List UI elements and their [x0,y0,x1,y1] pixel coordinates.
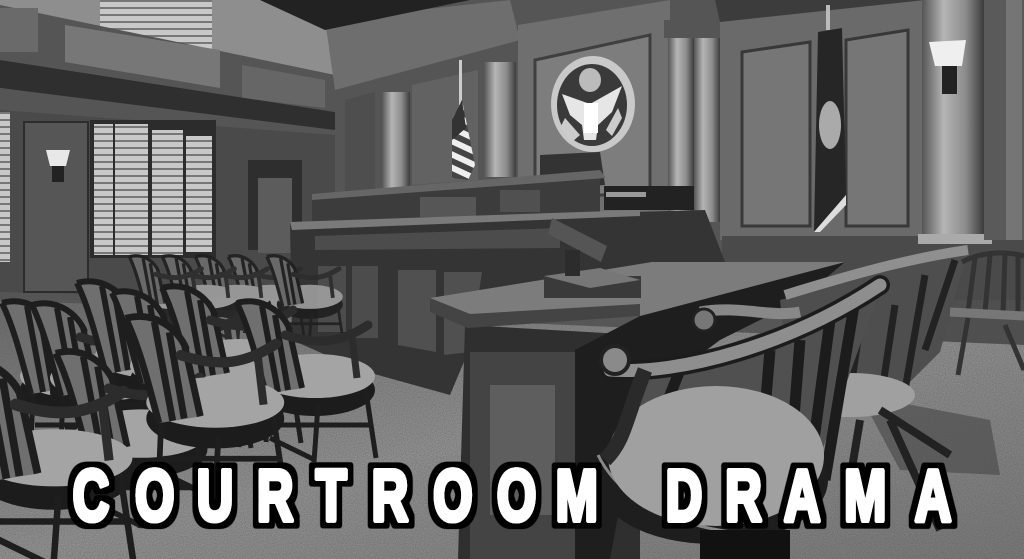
right wall panel [518,0,670,215]
right wall [720,0,925,240]
jury chairs behind [780,250,968,530]
window with blinds [90,120,216,258]
balcony railing [0,5,335,140]
left wood wall [0,110,335,300]
wall sconce right [929,40,966,94]
centre back wall [335,20,520,230]
books on bench [604,186,694,210]
floor [0,300,1024,559]
flag right [814,5,846,232]
column far right [918,0,1024,244]
left edge blinds [0,112,10,262]
cornice [325,0,520,90]
far right chair [950,253,1024,375]
column left [382,92,410,197]
upper bench [312,170,606,225]
centre panels [345,92,375,195]
columns right of seal [664,20,724,222]
wall sconce left [46,150,70,182]
seal [551,56,635,152]
upper left wall [0,0,335,135]
upper windows [100,0,212,50]
gallery chairs [0,281,376,559]
floor shadow right [860,395,1000,475]
clerk bench [290,210,725,395]
flag centre [452,60,475,180]
rear door [248,160,302,253]
foreground jury chair [596,285,880,559]
wainscot [722,236,1024,350]
counsel table [430,262,845,559]
gavel [544,218,641,298]
judge chair [540,152,605,190]
rear gallery chairs [129,256,343,344]
door left [24,122,88,292]
title: COURTROOM DRAMA [73,457,951,537]
wall panels [742,30,908,226]
column centre [484,62,516,177]
